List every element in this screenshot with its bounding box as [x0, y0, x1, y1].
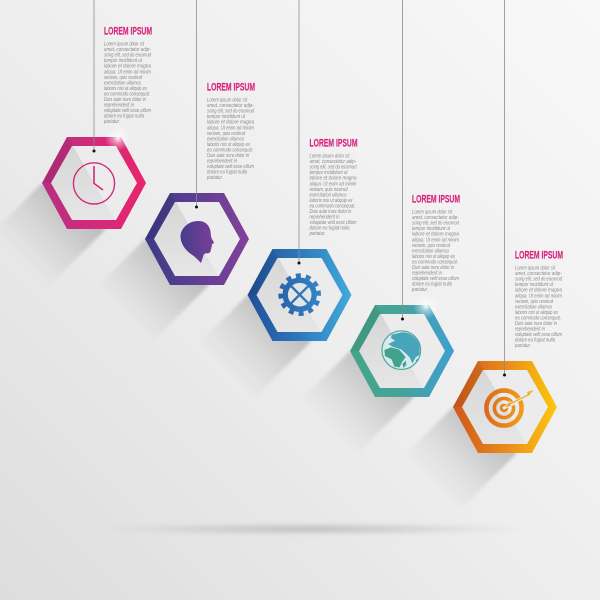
text block 5: reprehenderit in	[515, 327, 545, 333]
text block 5: tempor incididunt ut	[515, 282, 553, 288]
text block 2: voluptate velit esse cillum	[207, 164, 255, 170]
text block 2: veniam, quis nostrud	[207, 131, 246, 137]
hanging line 3	[298, 0, 300, 264]
long shadow 3	[178, 295, 312, 411]
text block 2	[206, 98, 255, 181]
long shadow 5	[383, 407, 517, 523]
hanging line 4	[401, 0, 404, 320]
heading 3: LOREM IPSUM	[310, 138, 358, 150]
text block 5: amet, consectetur adip-	[515, 271, 562, 277]
text block 1: exercitation ullamco	[104, 80, 141, 86]
text block 4	[411, 210, 460, 293]
text block 3: aliqua. Ut enim ad minim	[310, 181, 357, 187]
text block 2: dolore eu fugiat nulla	[207, 170, 247, 176]
text block 4: voluptate velit esse cillum	[412, 276, 460, 282]
text block 1: scing elit, sed do eiusmod	[104, 53, 152, 59]
heading 2: LOREM IPSUM	[207, 82, 255, 94]
text block 1: Lorem ipsum dolor sit	[104, 42, 144, 48]
text block 1: aliqua. Ut enim ad minim	[104, 69, 152, 75]
text block 1: labore et dolore magna	[104, 64, 151, 70]
text block 5	[514, 266, 563, 349]
text block 2: labore et dolore magna	[207, 120, 254, 126]
text block 4: laboris nisi ut aliquip ex	[412, 254, 455, 260]
icon: gear	[277, 272, 322, 317]
text block 3: dolore eu fugiat nulla	[310, 226, 350, 232]
text block 5: labore et dolore magna	[515, 288, 562, 294]
text block 2: reprehenderit in	[207, 159, 237, 165]
heading 1: LOREM IPSUM	[104, 26, 152, 38]
text block 2: aliqua. Ut enim ad minim	[207, 125, 255, 131]
text block 1: veniam, quis nostrud	[104, 75, 143, 81]
text block 4: dolore eu fugiat nulla	[412, 282, 452, 288]
hexagon 1	[42, 125, 146, 229]
step 1: clock	[0, 0, 152, 299]
step 5: target	[383, 0, 563, 523]
text block 2: Duis aute irure dolor in	[207, 153, 249, 159]
text block 1: dolore eu fugiat nulla	[104, 114, 144, 120]
text block 4: scing elit, sed do eiusmod	[412, 221, 460, 227]
icon: target	[486, 390, 534, 426]
long shadow 4	[280, 351, 414, 467]
text block 2: exercitation ullamco	[207, 136, 244, 142]
floor shadow	[97, 523, 527, 535]
text block 1: tempor incididunt ut	[104, 58, 142, 64]
text block 3: pariatur.	[309, 231, 326, 237]
text block 3: voluptate velit esse cillum	[310, 220, 357, 226]
text block 3: laboris nisi ut aliquip ex	[310, 198, 353, 204]
hexagon 3	[248, 249, 352, 341]
text block 3: ea commodo consequat.	[310, 203, 356, 209]
text block 3: Lorem ipsum dolor sit	[310, 154, 350, 160]
text block 1	[103, 42, 152, 125]
text block 3: veniam, quis nostrud	[310, 187, 348, 193]
text block 4: Lorem ipsum dolor sit	[412, 210, 452, 216]
text block 4: tempor incididunt ut	[412, 226, 450, 232]
hexagon 2	[145, 193, 249, 285]
text block 1: amet, consectetur adip-	[104, 47, 151, 53]
text block 2: ea commodo consequat.	[207, 147, 253, 153]
text block 5: pariatur.	[514, 343, 531, 349]
text block 5: ea commodo consequat.	[515, 315, 561, 321]
text block 3	[309, 154, 357, 237]
text block 4: amet, consectetur adip-	[412, 215, 459, 221]
hexagon 5	[453, 361, 557, 453]
text block 5: voluptate velit esse cillum	[515, 332, 563, 338]
text block 5: scing elit, sed do eiusmod	[515, 277, 563, 283]
text block 3: amet, consectetur adip-	[310, 159, 356, 165]
text block 1: reprehenderit in	[104, 103, 134, 109]
hexagon 4	[350, 293, 454, 397]
heading 5: LOREM IPSUM	[515, 250, 563, 262]
text block 4: aliqua. Ut enim ad minim	[412, 237, 460, 243]
heading 4: LOREM IPSUM	[412, 194, 460, 206]
text block 5: Lorem ipsum dolor sit	[515, 266, 555, 272]
text block 1: laboris nisi ut aliquip ex	[104, 86, 147, 92]
text block 4: pariatur.	[411, 287, 428, 293]
text block 1: Duis aute irure dolor in	[104, 97, 146, 103]
hanging line 1	[92, 0, 96, 152]
text block 4: ea commodo consequat.	[412, 259, 458, 265]
text block 2: scing elit, sed do eiusmod	[207, 109, 255, 115]
text block 3: scing elit, sed do eiusmod	[310, 165, 357, 171]
text block 1: voluptate velit esse cillum	[104, 108, 152, 114]
text block 3: exercitation ullamco	[310, 192, 347, 198]
text block 5: exercitation ullamco	[515, 304, 552, 310]
text block 3: tempor incididunt ut	[310, 170, 348, 176]
long shadow 1	[0, 183, 106, 299]
long shadow 2	[75, 239, 209, 355]
step 3: gear	[178, 0, 358, 411]
step 4: globe	[280, 0, 460, 467]
icon: head	[181, 221, 214, 263]
text block 2: amet, consectetur adip-	[207, 103, 254, 109]
text block 4: veniam, quis nostrud	[412, 243, 451, 249]
text block 2: Lorem ipsum dolor sit	[207, 98, 247, 104]
text block 5: aliqua. Ut enim ad minim	[515, 293, 563, 299]
text block 5: laboris nisi ut aliquip ex	[515, 310, 558, 316]
text block 5: veniam, quis nostrud	[515, 299, 554, 305]
text block 3: reprehenderit in	[310, 215, 340, 221]
step 2: head	[75, 0, 255, 355]
text block 5: dolore eu fugiat nulla	[515, 338, 555, 344]
text block 4: Duis aute irure dolor in	[412, 265, 454, 271]
text block 1: ea commodo consequat.	[104, 91, 150, 97]
text block 3: labore et dolore magna	[310, 176, 357, 182]
icon: globe	[382, 331, 421, 369]
text block 2: pariatur.	[206, 175, 223, 181]
hanging line 5	[503, 0, 506, 376]
text block 4: reprehenderit in	[412, 271, 442, 277]
text block 2: tempor incididunt ut	[207, 114, 245, 120]
text block 4: labore et dolore magna	[412, 232, 459, 238]
text block 2: laboris nisi ut aliquip ex	[207, 142, 250, 148]
icon: clock	[73, 163, 115, 204]
text block 4: exercitation ullamco	[412, 248, 449, 254]
text block 5: Duis aute irure dolor in	[515, 321, 557, 327]
hanging line 2	[195, 0, 198, 208]
text block 1: pariatur.	[103, 119, 120, 125]
text block 3: Duis aute irure dolor in	[310, 209, 352, 215]
